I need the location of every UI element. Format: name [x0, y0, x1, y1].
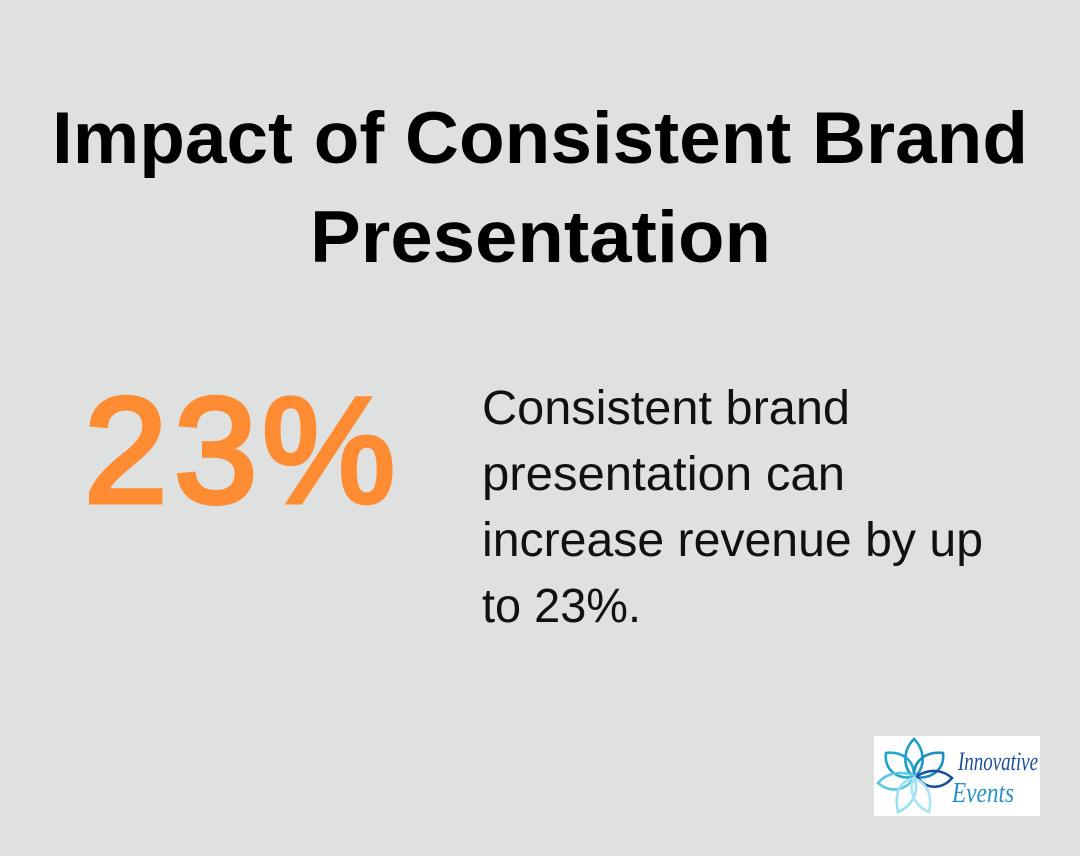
logo wordmark: [951, 747, 1038, 809]
title: Impact of Consistent Brand: [52, 98, 1028, 179]
description text: presentation can: [482, 448, 845, 501]
icon: lotus flower: [878, 739, 952, 812]
logo wordmark: Events: [951, 778, 1014, 809]
title: Presentation: [310, 197, 771, 278]
description text: [482, 382, 983, 633]
description text: increase revenue by up: [482, 514, 983, 567]
logo: Innovative Events: [874, 736, 1040, 816]
big statistic: 23%: 23%: [84, 366, 395, 534]
description text: Consistent brand: [482, 382, 850, 435]
description text: to 23%.: [482, 580, 641, 633]
logo wordmark: Innovative: [957, 747, 1038, 776]
title: [52, 98, 1028, 278]
